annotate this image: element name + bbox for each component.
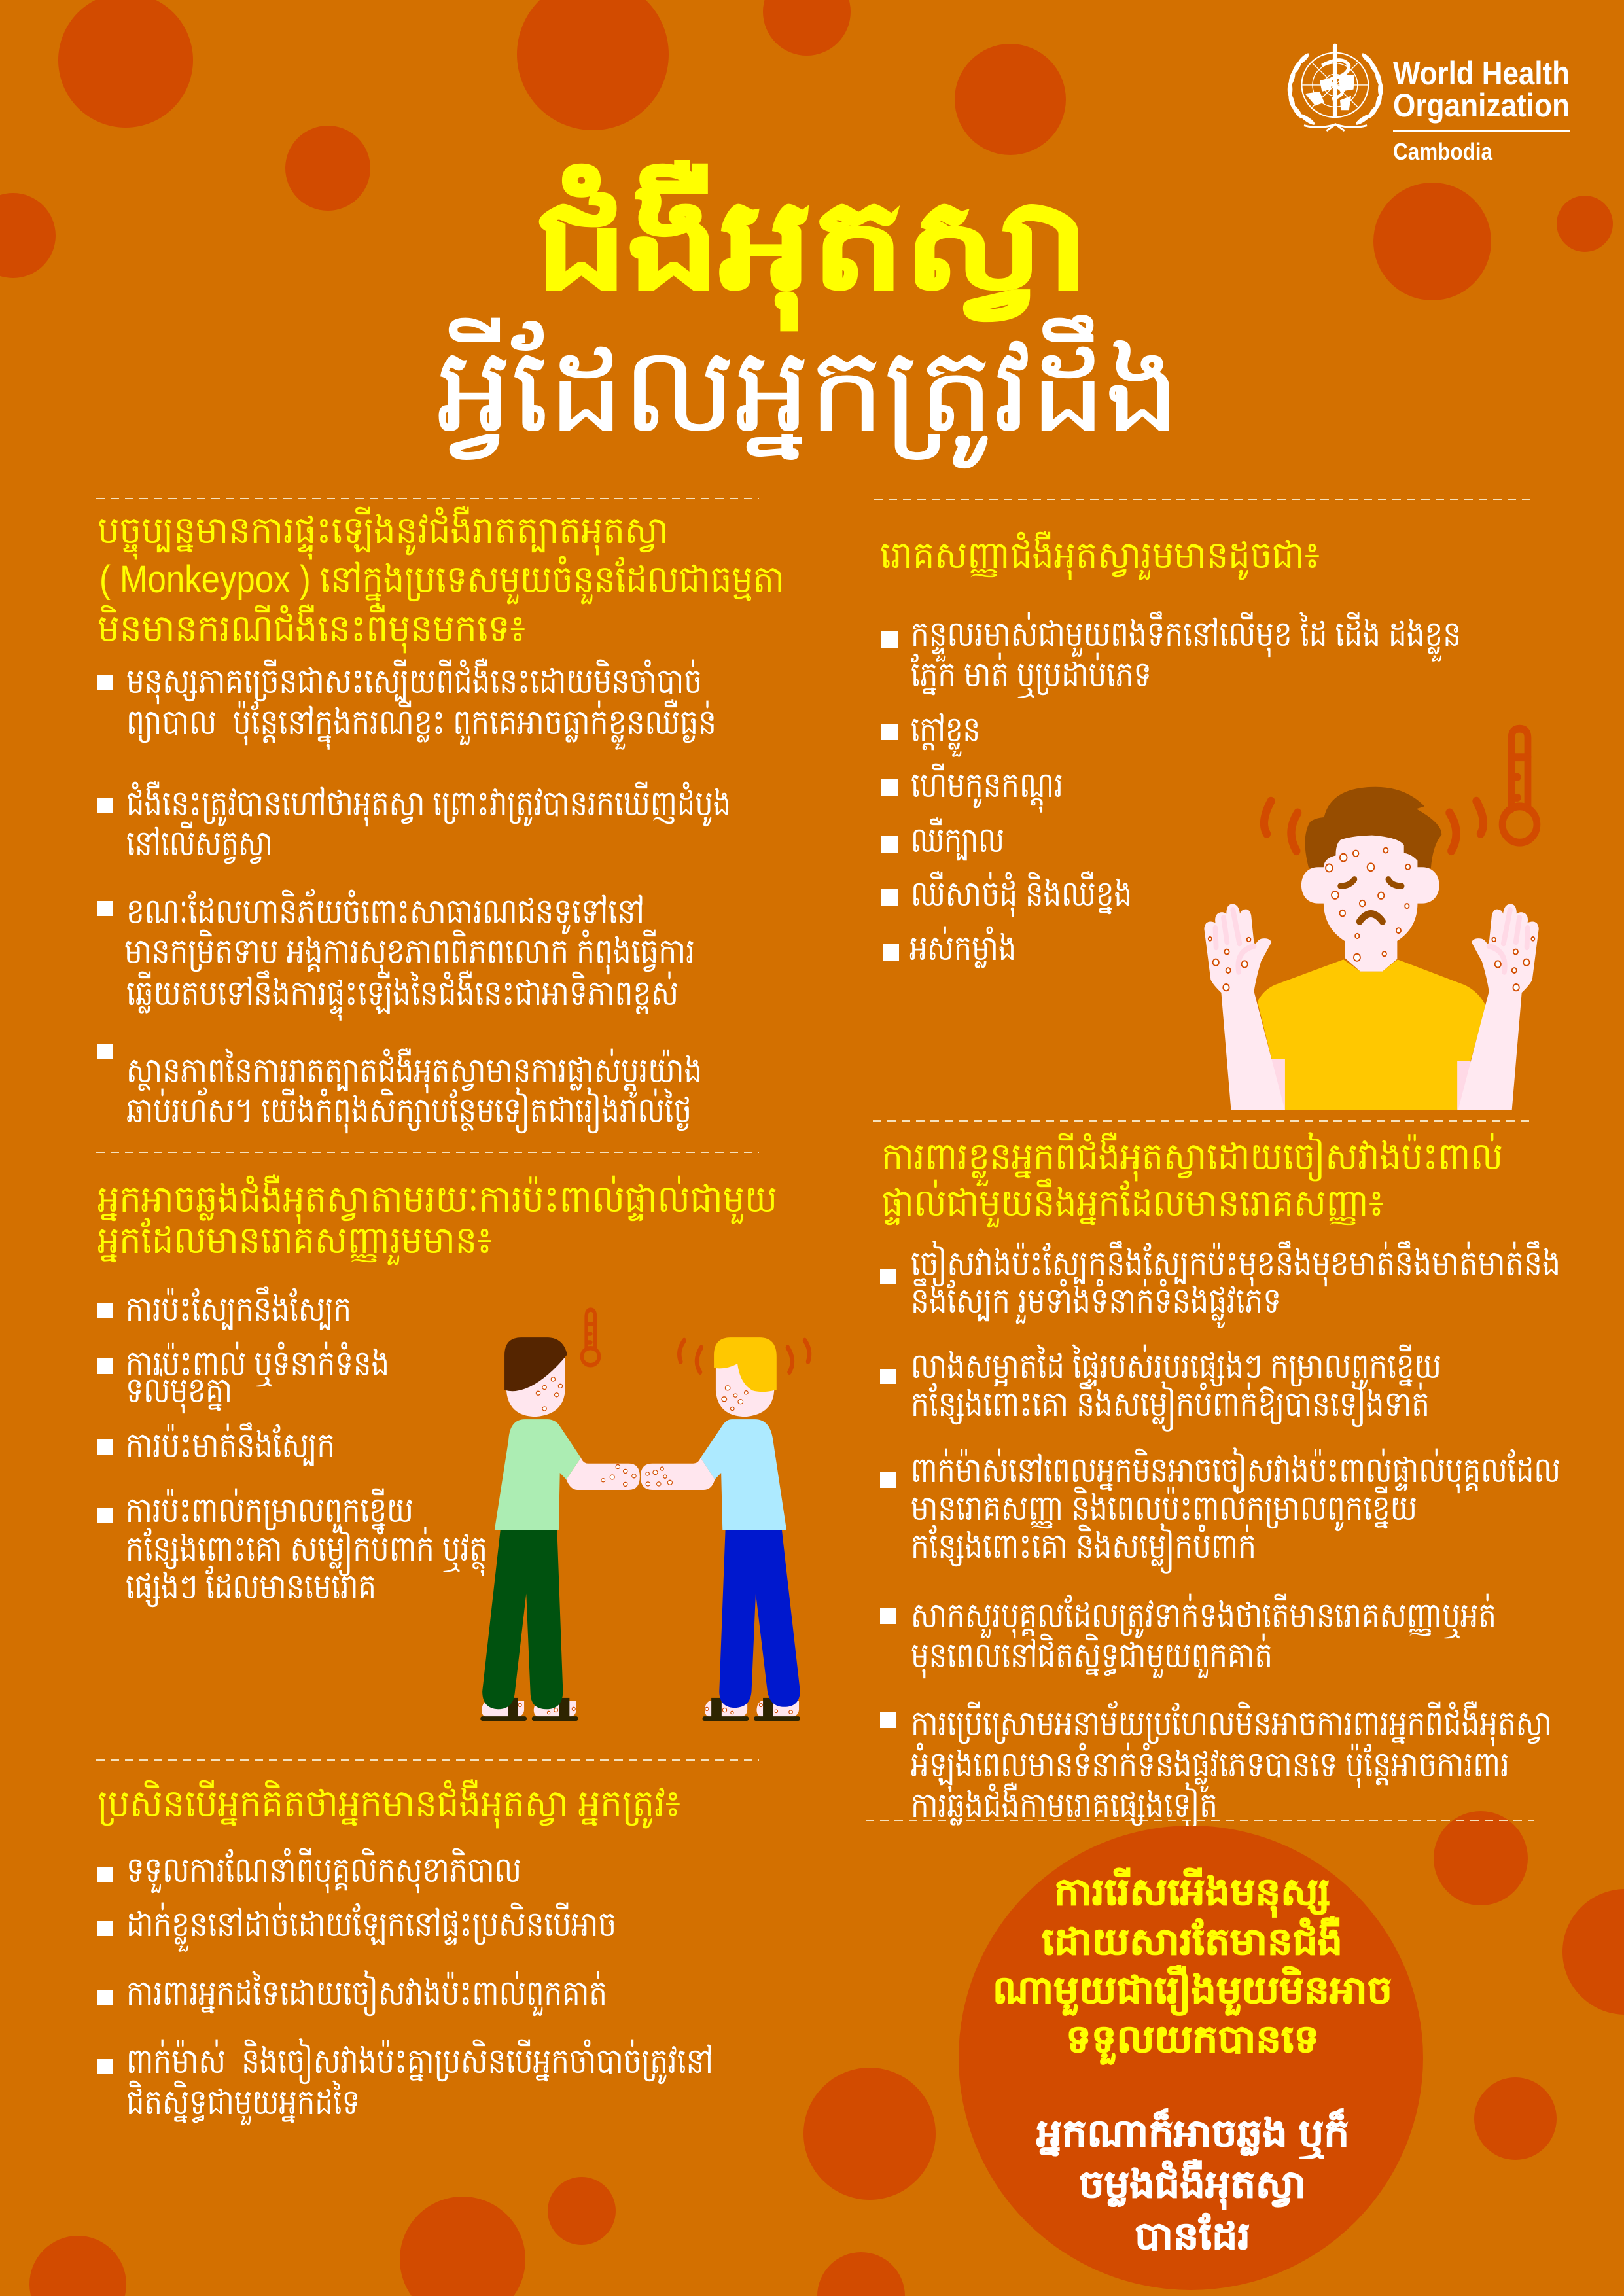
sleeve shading <box>1271 1059 1470 1110</box>
bullet list <box>880 1241 1561 1829</box>
bullet list: កន្ទួលរមាស់ជាមួយពងទឹកនៅលើមុខ ដៃ ដើង ដងខ្លួន <box>911 611 1461 662</box>
heading <box>97 506 785 654</box>
bullet list: ទទួលការណែនាំពីបុគ្គលិកសុខាភិបាល <box>126 1848 521 1894</box>
panel: protect yourself <box>880 1132 1561 1829</box>
rash spots <box>1209 848 1534 991</box>
icon: thermometer <box>582 1310 599 1365</box>
bullet list: ទល់មុខគ្នា <box>126 1368 232 1414</box>
bullet list: អស់កម្លាំង <box>909 926 1016 968</box>
bullet list: ដាក់ខ្លួននៅដាច់ដោយឡែកនៅផ្ទះប្រសិនបើអាច <box>126 1902 616 1952</box>
bullet list: ឆាប់រហ័ស។ យើងកំពុងសិក្សាបន្ថែមទៀតជារៀងរាល់ថ្ងៃ <box>126 1087 692 1134</box>
left person <box>480 1337 640 1721</box>
bullet list: មុនពេលនៅជិតស្និទ្ធជាមួយពួកគាត់ <box>911 1633 1273 1679</box>
icon: thermometer <box>1502 729 1537 843</box>
logo wordmark: Organization <box>1393 87 1570 124</box>
bullet list <box>97 1848 713 2126</box>
heading: បច្ចុប្បន្នមានការផ្ទុះឡើងនូវជំងឺរាតត្បាតអុតស្វា <box>97 506 669 560</box>
bullet list: ឈឺក្បាល <box>911 817 1004 861</box>
bullet list: ជិតស្និទ្ធជាមួយអ្នកដទៃ <box>126 2080 360 2126</box>
bullet list: ភ្នែក មាត់ ឬប្រដាប់ភេទ <box>911 652 1152 698</box>
logo: World Health Organization Cambodia <box>1287 46 1570 165</box>
facial features <box>1341 879 1402 921</box>
bullet list: សាកសួរបុគ្គលដែលត្រូវទាក់ទងថាតើមានរោគសញ្ញាឬអត់ <box>911 1593 1496 1639</box>
bullet list: ហើមកូនកណ្តុរ <box>911 763 1063 813</box>
heading: ( Monkeypox ) នៅក្នុងប្រទេសមួយចំនួនដែលជាធម្មតា <box>99 556 785 609</box>
logo wordmark: Cambodia <box>1393 138 1493 165</box>
callout text: yellow <box>993 1867 1392 2065</box>
t-shirt <box>1258 959 1486 1110</box>
panel: symptoms <box>880 531 1461 968</box>
bullet list: ព្យាបាល ប៉ុន្តែនៅក្នុងករណីខ្លះ ពួកគេអាចធ្លាក់ខ្លួនឈឺធ្ងន់ <box>126 699 716 750</box>
bullet list: កន្សែងពោះគោ និងសម្លៀកបំពាក់ <box>911 1523 1256 1574</box>
heading: អ្នកដែលមានរោគសញ្ញារួមមាន៖ <box>97 1218 492 1265</box>
bullet list: ខណៈដែលហានិភ័យចំពោះសាធារណជនទូទៅនៅ <box>126 889 644 935</box>
heading: អ្នកអាចឆ្លងជំងឺអុតស្វាតាមរយៈការប៉ះពាល់ផ្ទាល់ជាមួយ <box>97 1174 777 1224</box>
left hand and arm <box>1204 904 1285 1110</box>
logo wordmark <box>1393 55 1570 165</box>
callout text: white <box>1036 2108 1349 2257</box>
bullet list <box>97 658 731 1134</box>
logo wordmark: World Health <box>1393 55 1570 92</box>
bullet list <box>97 1286 487 1608</box>
heading <box>881 1132 1503 1228</box>
callout text: yellow: ទទួលយកបានទេ <box>1066 2018 1319 2065</box>
title: ជំងឺអុតស្វា <box>535 161 1089 330</box>
icon: heat waves <box>1264 801 1483 851</box>
bullet list <box>881 611 1461 968</box>
panel: what to do if you think you have monkeypox <box>97 1779 713 2126</box>
bullet list: ស្ថានភាពនៃការរាតត្បាតជំងឺអុតស្វាមានការផ្លាស់ប្តូរយ៉ាង <box>126 1048 702 1098</box>
bullet list: ឈឺសាច់ដុំ និងឈឺខ្នង <box>911 871 1132 917</box>
icon: WHO emblem <box>1287 46 1383 131</box>
bullet list: ឆ្លើយតបទៅនឹងការផ្ទុះឡើងនៃជំងឺនេះជាអាទិភាពខ្ពស់ <box>126 970 679 1021</box>
callout text: yellow: ការរើសអើងមនុស្ស <box>1054 1867 1330 1918</box>
dashed dividers <box>96 499 1534 1820</box>
bullet list: ក្តៅខ្លួន <box>911 710 980 757</box>
callout text: yellow: ដោយសារតែមានជំងឺ <box>1042 1916 1343 1963</box>
title <box>437 161 1180 468</box>
bullet list: នឹងស្បែក រួមទាំងទំនាក់ទំនងផ្លូវភេទ <box>911 1278 1281 1328</box>
bullet list: កន្សែងពោះគោ និងសម្លៀកបំពាក់ឱ្យបានទៀងទាត់ <box>911 1381 1430 1432</box>
panel: outbreak introduction <box>97 506 785 1134</box>
bullet list: ការប៉ះស្បែកនឹងស្បែក <box>126 1286 351 1330</box>
illustration: two people touching fists <box>480 1310 809 1721</box>
face and neck <box>1301 836 1439 972</box>
heading: រោគសញ្ញាជំងឺអុតស្វារួមមានដូចជា៖ <box>880 531 1320 580</box>
icon: heat waves <box>679 1341 809 1372</box>
bullet list: ការឆ្លងជំងឺកាមរោគផ្សេងទៀត <box>911 1782 1218 1829</box>
callout text: white: អ្នកណាក៏អាចឆ្លង ឬក៏ <box>1036 2108 1349 2159</box>
heading: ប្រសិនបើអ្នកគិតថាអ្នកមានជំងឺអុតស្វា អ្នកត្រូវ៖ <box>97 1779 680 1829</box>
bullet list: ជំងឺនេះត្រូវបានហៅថាអុតស្វា ព្រោះវាត្រូវបានរកឃើញដំបូង <box>126 781 731 827</box>
callout text: white: ចម្លងជំងឺអុតស្វា <box>1079 2159 1306 2210</box>
panel: how it spreads <box>97 1174 777 1608</box>
right hand and arm <box>1458 904 1539 1110</box>
hair <box>1305 787 1441 868</box>
bullet list: មានកម្រិតទាប អង្គការសុខភាពពិភពលោក កំពុងធ្វើការ <box>124 929 695 975</box>
bullet list: ការប៉ះមាត់នឹងស្បែក <box>126 1422 335 1466</box>
heading: មិនមានករណីជំងឺនេះពីមុនមកទេ៖ <box>97 604 525 654</box>
bullet list: ការប៉ះពាល់កម្រាលពូកខ្នើយ <box>126 1488 414 1534</box>
heading: ការពារខ្លួនអ្នកពីជំងឺអុតស្វាដោយចៀសវាងប៉ះពាល់ <box>881 1132 1503 1186</box>
bullet list: ផ្សេងៗ ដែលមានមេរោគ <box>126 1565 376 1608</box>
bullet list: លាងសម្អាតដៃ ផ្ទៃរបស់របរផ្សេងៗ កម្រាលពូកខ្នើយ <box>911 1344 1441 1390</box>
illustration: man with rash and fever <box>1204 729 1539 1110</box>
bullet list: ការប៉ះពាល់ ឬទំនាក់ទំនង <box>126 1341 389 1387</box>
title: អ្វីដែលអ្នកត្រូវដឹង <box>437 315 1180 468</box>
heading <box>97 1174 777 1265</box>
bullet list: នៅលើសត្វស្វា <box>126 821 273 864</box>
right person <box>641 1337 800 1721</box>
callout: stigma circle <box>959 1826 1423 2290</box>
bullet list: កន្សែងពោះគោ សម្លៀកបំពាក់ ឬវត្ថុ <box>126 1526 487 1576</box>
callout text: white: បានដែរ <box>1135 2213 1250 2257</box>
bullet list: ពាក់ម៉ាស់ និងចៀសវាងប៉ះគ្នាប្រសិនបើអ្នកចាំបាច់ត្រូវនៅ <box>126 2038 713 2085</box>
bullet list: មានរោគសញ្ញា និងពេលប៉ះពាល់កម្រាលពូកខ្នើយ <box>911 1486 1417 1532</box>
heading: ផ្ទាល់ជាមួយនឹងអ្នកដែលមានរោគសញ្ញា៖ <box>881 1178 1384 1228</box>
bullet list: ការពារអ្នកដទៃដោយចៀសវាងប៉ះពាល់ពួកគាត់ <box>126 1970 607 2017</box>
bullet list: មនុស្សភាគច្រើនជាសះស្បើយពីជំងឺនេះដោយមិនចាំបាច់ <box>126 658 702 705</box>
callout text: yellow: ណាមួយជារឿងមួយមិនអាច <box>993 1965 1392 2016</box>
